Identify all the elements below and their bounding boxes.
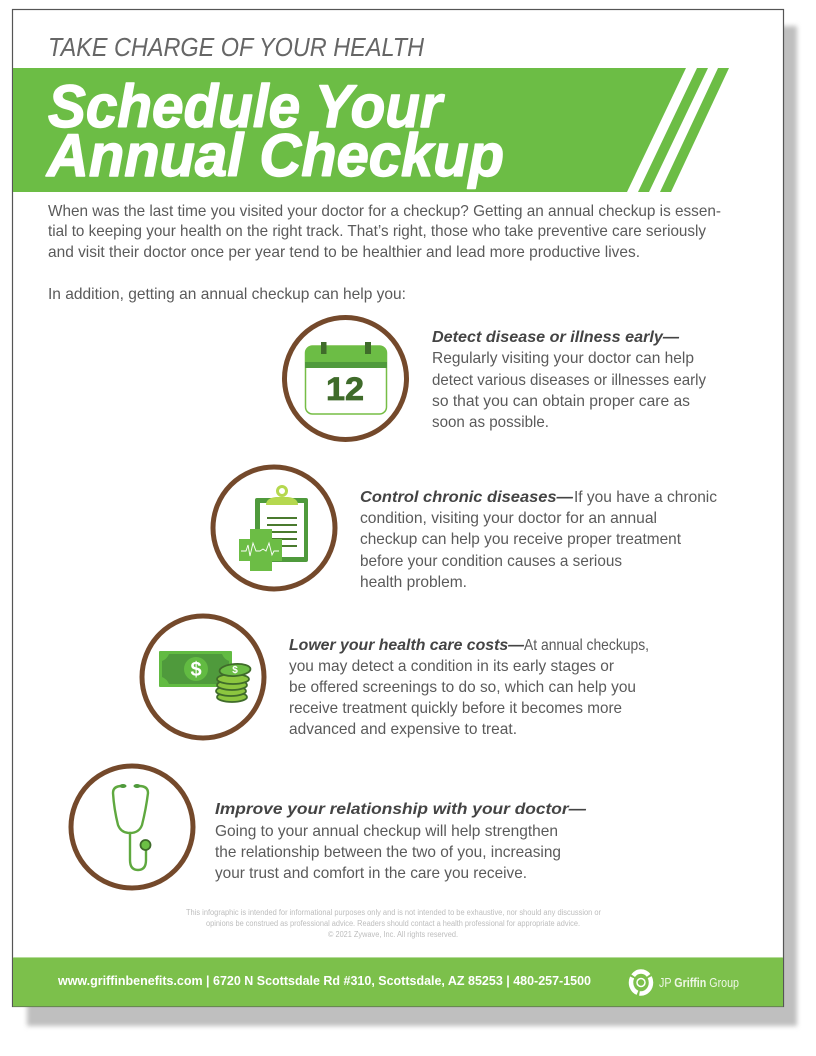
intro paragraph: When was the last time you visited your doctor for a checkup? Getting an annual checkup is essen-: [48, 203, 721, 220]
title text: Schedule Your: [48, 73, 445, 140]
title banner: [13, 68, 729, 192]
disclaimer: [186, 908, 601, 939]
icon: money and coins: $: [190, 659, 202, 681]
text: detect disease: soon as possible.: [432, 414, 549, 431]
text: lower health care costs: you may detect a condition in its early stages or: [289, 658, 615, 675]
footer contact line: www.griffinbenefits.com | 6720 N Scottsdale Rd #310, Scottsdale, AZ 85253 | 480-257-1500: [57, 973, 591, 988]
intro paragraph: and visit their doctor once per year tend to be healthier and lead more productive lives.: [48, 244, 640, 261]
icon: stethoscope: [71, 766, 193, 888]
disclaimer: This infographic is intended for informational purposes only and is not intended to be exhaustive, nor should any discussion or: [186, 908, 601, 917]
icon: calendar: 12: [326, 371, 364, 407]
text: detect disease: so that you can obtain proper care as: [432, 393, 690, 410]
title text: Annual Checkup: [45, 122, 504, 189]
text: detect disease: Regularly visiting your doctor can help: [432, 350, 694, 367]
text: lower health care costs: [289, 637, 649, 738]
intro paragraph: tial to keeping your health on the right track. That’s right, those who take preventive care seriously: [48, 223, 706, 240]
logo wordmark: JP Griffin Group: [659, 975, 739, 990]
text: improve relationship: the relationship between the two of you, increasing: [215, 844, 561, 861]
icon: clipboard with medical cross: [213, 467, 335, 589]
text: lower health care costs: advanced and expensive to treat.: [289, 721, 517, 738]
text: improve relationship: [215, 801, 587, 882]
logo mark: [631, 972, 651, 994]
text: control chronic diseases: [360, 489, 717, 591]
text: detect disease: [432, 329, 706, 431]
text: lower health care costs: receive treatment quickly before it becomes more: [289, 700, 622, 717]
icon: money and coins: $: [232, 665, 238, 676]
text: improve relationship: Going to your annual checkup will help strengthen: [215, 823, 558, 840]
title text: [45, 73, 504, 189]
intro paragraph: [48, 203, 721, 261]
footer bar: [13, 957, 783, 1006]
text: improve relationship: your trust and comfort in the care you receive.: [215, 865, 527, 882]
text: control chronic diseases: checkup can help you receive proper treatment: [360, 531, 682, 548]
text: detect disease: Detect disease or illness early—: [432, 329, 680, 346]
text: improve relationship: Improve your relationship with your doctor—: [215, 801, 587, 818]
text: control chronic diseases: before your condition causes a serious: [360, 553, 622, 570]
text: control chronic diseases: health problem.: [360, 574, 467, 591]
icon: calendar: [284, 318, 406, 440]
text: lower health care costs: be offered screenings to do so, which can help you: [289, 679, 636, 696]
icon: money and coins: [142, 616, 264, 738]
text: control chronic diseases: condition, visiting your doctor for an annual: [360, 510, 657, 527]
text: lower health care costs: At annual checkups,: [524, 637, 649, 654]
text: lower health care costs: Lower your health care costs—: [289, 637, 525, 654]
eyebrow heading: TAKE CHARGE OF YOUR HEALTH: [48, 32, 424, 62]
text: control chronic diseases: Control chronic diseases—: [360, 489, 574, 506]
disclaimer: opinions be construed as professional advice. Readers should contact a health professional for appropriate advice.: [206, 919, 580, 928]
text: control chronic diseases: If you have a chronic: [574, 489, 717, 506]
text: detect disease: detect various diseases or illnesses early: [432, 372, 706, 389]
lead-in sentence: In addition, getting an annual checkup can help you:: [48, 286, 406, 303]
disclaimer: © 2021 Zywave, Inc. All rights reserved.: [328, 930, 458, 939]
